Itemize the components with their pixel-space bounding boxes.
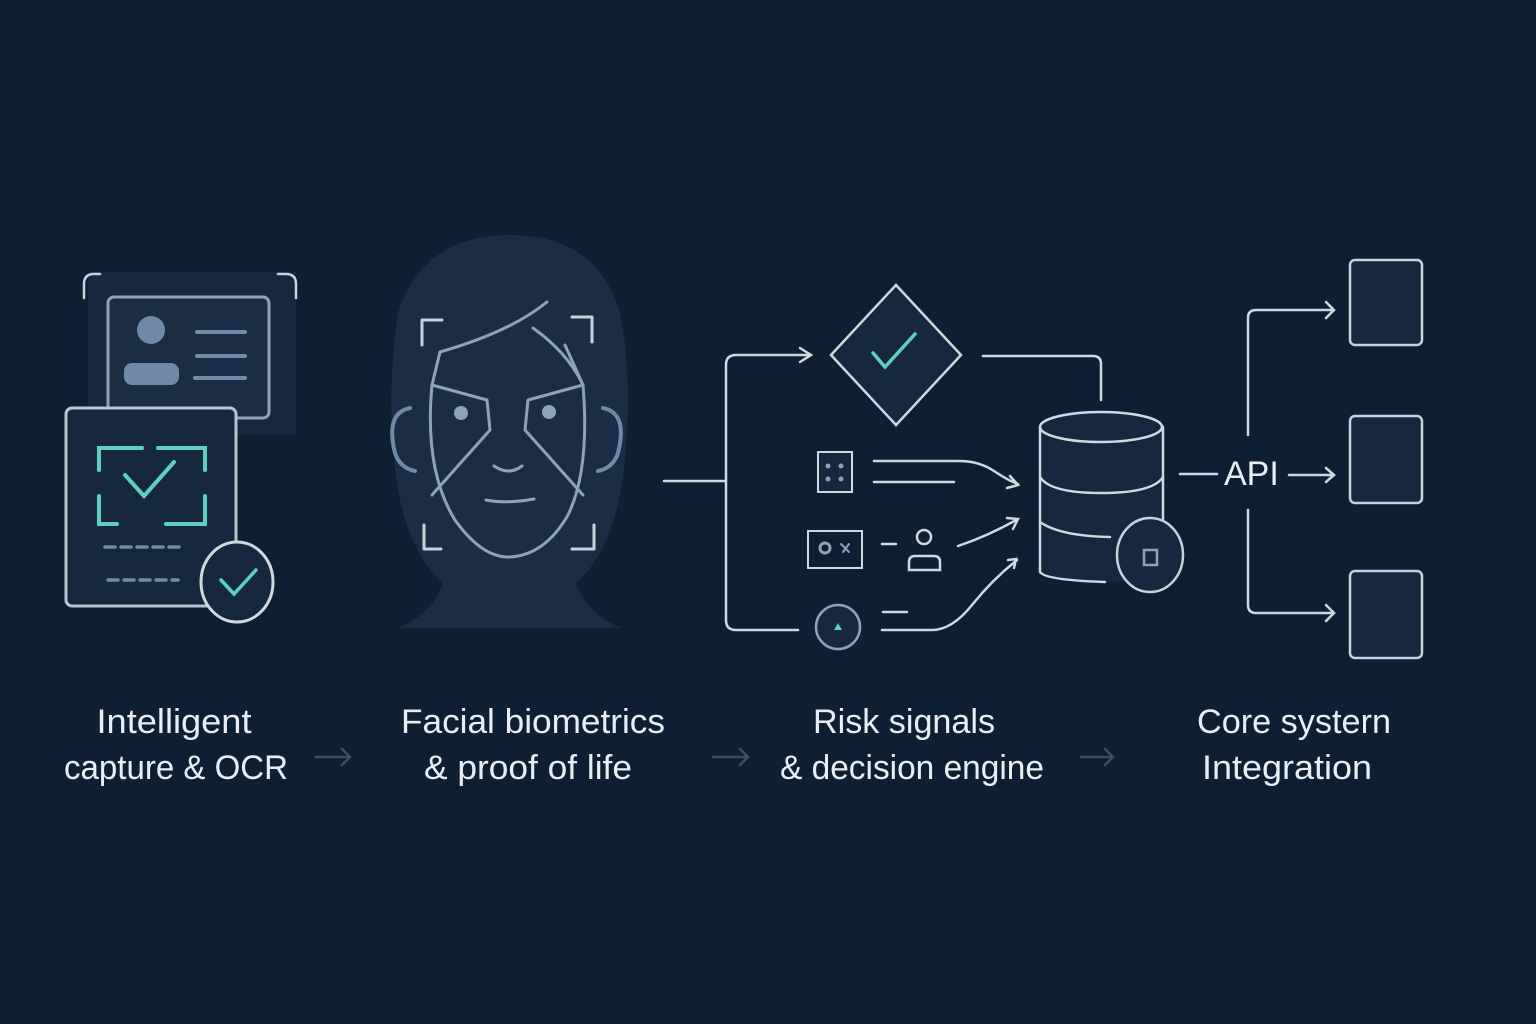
label: Facial biometrics: Facial biometrics bbox=[401, 703, 665, 741]
panel: core system integration bbox=[1180, 260, 1422, 658]
arrows between steps bbox=[316, 749, 1113, 765]
panel: capture & OCR icon bbox=[66, 272, 296, 622]
icon: check badge bbox=[201, 542, 273, 622]
icon: scanned document bbox=[66, 408, 236, 606]
label: Risk signals bbox=[780, 703, 1044, 787]
label: Facial biometrics bbox=[401, 703, 665, 787]
label: Facial biometrics: & proof of life bbox=[424, 749, 632, 787]
label: API: API bbox=[1224, 455, 1279, 493]
label: Risk signals: Risk signals bbox=[813, 703, 995, 741]
label: Intelligent capture & OCR bbox=[64, 703, 288, 787]
panel: risk signals & decision engine diagram bbox=[664, 285, 1183, 649]
panel: facial biometrics icon bbox=[391, 235, 628, 628]
icon: ID card bbox=[108, 297, 269, 418]
label: Intelligent capture & OCR: capture & OCR bbox=[64, 749, 288, 787]
label: Intelligent capture & OCR: Intelligent bbox=[96, 703, 252, 741]
icon: database bbox=[1040, 411, 1183, 592]
label: Core system bbox=[1197, 703, 1391, 787]
label: Core system: Integration bbox=[1202, 749, 1372, 787]
icon: decision diamond bbox=[831, 285, 961, 425]
label: Core system: Core systern bbox=[1197, 703, 1391, 741]
label: Risk signals: & decision engine bbox=[780, 749, 1044, 787]
